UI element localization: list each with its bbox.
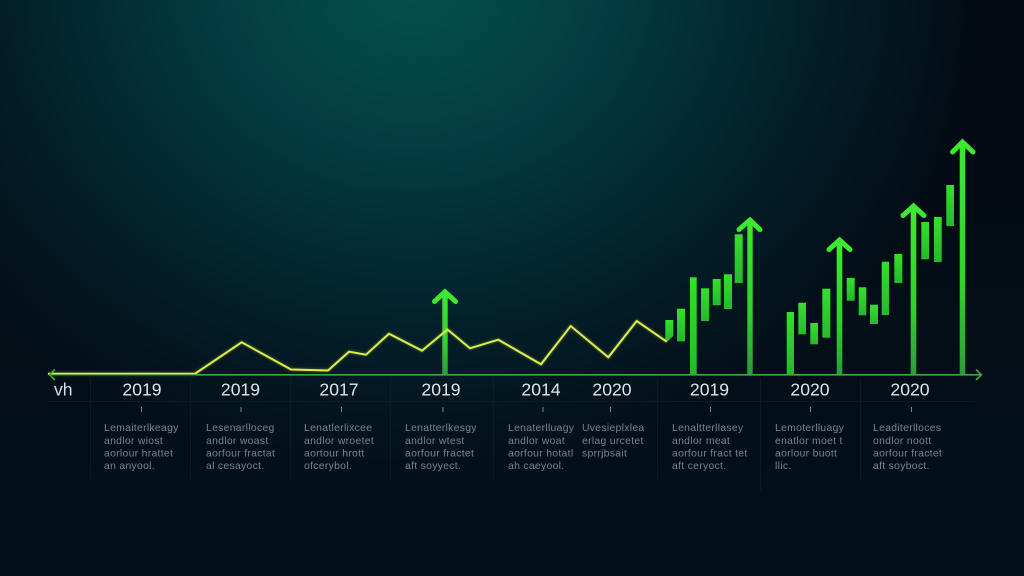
year labels: 2017: [319, 380, 359, 400]
timeline axis: [50, 370, 982, 380]
growth arrow 5: [952, 142, 973, 374]
description 7: [672, 423, 748, 472]
description 9: [873, 423, 942, 472]
description 9: aft soyboct.: [873, 461, 930, 472]
description 4: andlor wtest: [405, 436, 465, 447]
description 5: [508, 423, 575, 472]
description 2: al cesayoct.: [206, 461, 264, 472]
year labels: 2019: [122, 380, 162, 400]
growth arrow 2: [739, 220, 760, 374]
description 3: Lenatlerlixcee: [304, 423, 372, 434]
description 2: andlor woast: [206, 436, 269, 447]
year labels: 2020: [592, 380, 632, 400]
description 7: aorfour fract tet: [672, 448, 748, 460]
year labels: 2019: [221, 380, 260, 400]
description 5: andlor woat: [508, 436, 565, 447]
description 4: [405, 423, 477, 472]
axis stub label: vh: [54, 380, 73, 400]
description 9: ondlor noott: [873, 436, 931, 447]
description 6: [582, 423, 645, 460]
description 4: aorfour fractet: [405, 448, 474, 460]
description 5: aorfour hotatl: [508, 448, 573, 460]
description 2: Lesenarlloceg: [206, 423, 275, 434]
description 8: [775, 423, 845, 472]
year labels: 2019: [421, 380, 461, 400]
description 8: Lemoterlluagy: [775, 423, 845, 434]
description 1: Lemaiterlkeagy: [104, 423, 179, 434]
growth arrow 4: [903, 206, 924, 374]
description 3: andlor wroetet: [304, 436, 374, 447]
bars and arrows chart: [434, 142, 973, 374]
yellow trend line: [48, 321, 667, 374]
year labels: [122, 380, 930, 400]
description 7: Lenaltterllasey: [672, 423, 744, 434]
description 8: llic.: [775, 461, 792, 472]
growth arrow 1: [434, 292, 456, 374]
description 8: aorlour buott: [775, 448, 837, 460]
description 5: ah caeyool.: [508, 461, 564, 472]
growth arrow 3: [829, 240, 850, 374]
description 6: sprrjbsait: [582, 448, 627, 460]
description 2: aorfour fractat: [206, 448, 275, 460]
description 8: enatlor moet t: [775, 436, 843, 447]
year labels: 2019: [690, 380, 729, 400]
year labels: 2020: [790, 380, 830, 400]
description 7: andlor meat: [672, 436, 730, 447]
description 3: ofcerybol.: [304, 461, 352, 472]
description 4: Lenatterlkesgy: [405, 423, 477, 434]
year labels: 2014: [521, 380, 561, 400]
description 1: aorlour hrattet: [104, 448, 173, 460]
year labels: 2020: [890, 380, 930, 400]
description 9: aorfour fractet: [873, 448, 942, 460]
description 9: Leaditerlloces: [873, 423, 941, 434]
description 1: andlor wiost: [104, 436, 163, 447]
description 6: Uvesieplxlea: [582, 423, 645, 434]
description 1: [104, 423, 179, 472]
description 3: [304, 423, 374, 472]
candlestick bars: [665, 185, 954, 374]
description 4: aft soyyect.: [405, 461, 461, 472]
description 3: aortour hrott: [304, 448, 365, 460]
tick marks: [142, 407, 912, 412]
description 6: erlag urcetet: [582, 436, 644, 447]
description 7: aft ceryoct.: [672, 461, 726, 472]
description 1: an anyool.: [104, 461, 155, 472]
description 2: [206, 423, 275, 472]
description 5: Lenaterlluagy: [508, 423, 575, 434]
